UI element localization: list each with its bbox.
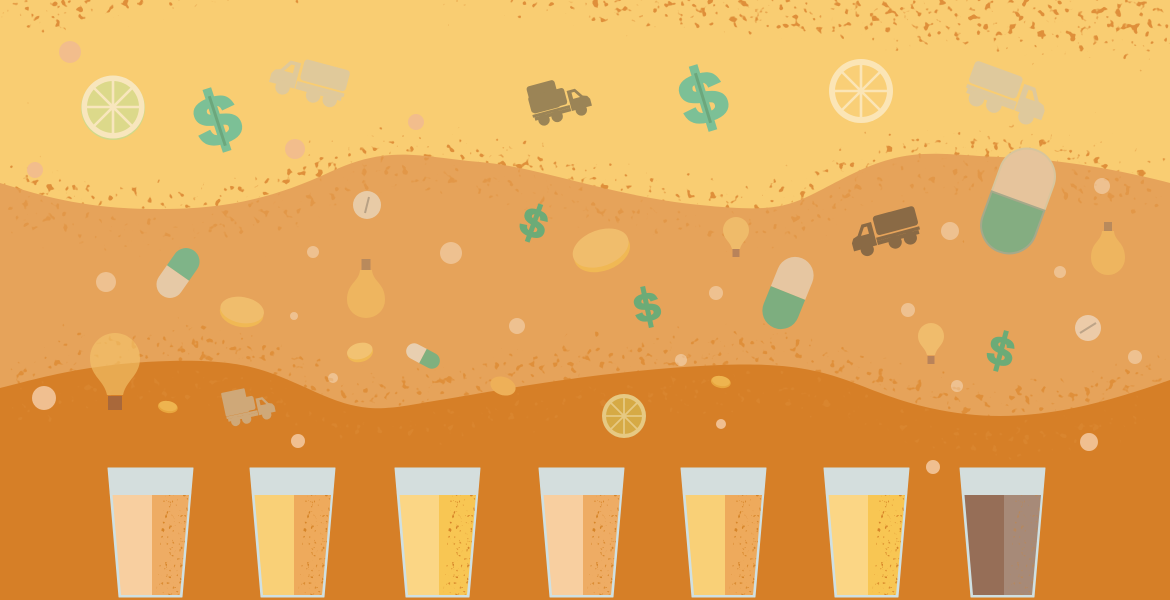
icon: coin faded: [488, 373, 518, 399]
icon: coin large: [567, 221, 636, 280]
icon: dark truck top centre: [525, 72, 594, 128]
glass 5: [681, 468, 766, 597]
icon: bulb inverted right: [1091, 222, 1125, 275]
icon: tiny capsule: [403, 340, 443, 372]
icon: coin left: [218, 293, 266, 331]
icon: dollar 2: $: [670, 54, 736, 142]
speckles: above lower wave: [0, 348, 1170, 403]
speckles: inside lower wave: [0, 385, 1170, 440]
icon: bulb upper middle: [723, 217, 749, 257]
icon: dollar 4: $: [630, 284, 664, 332]
middle orange wave layer: [0, 154, 1170, 600]
icon: dollar 1: $: [185, 78, 250, 164]
icon: dollar 5: $: [983, 327, 1019, 377]
icon: dollar 3: $: [514, 199, 553, 249]
icon: tablet right: [1075, 315, 1101, 341]
icon: faded truck bottom: [221, 383, 277, 428]
speckles: above middle wave: [0, 154, 1170, 209]
icon: large bulb left: [90, 333, 140, 410]
speckles: inside middle wave: [0, 174, 1170, 229]
icon: medium capsule: [757, 251, 819, 335]
icon: bulb inverted left: [347, 259, 385, 318]
icon: large capsule: [973, 141, 1063, 261]
glass 6: [824, 468, 909, 597]
icon: orange slice top right: [829, 59, 893, 123]
icon: lemon slice bottom: [602, 394, 646, 438]
glass 7: [960, 468, 1045, 597]
icon: tablet top: [353, 191, 381, 219]
glass 3: [395, 468, 480, 597]
icon: lime slice left: [81, 76, 145, 140]
icon: coin bottom left: [157, 399, 179, 415]
icon: coin bottom centre: [710, 374, 732, 390]
icon: pale truck top left: [267, 51, 351, 110]
glass 4: [539, 468, 624, 597]
speckles: top band: [0, 0, 1170, 62]
icon: pale truck top right: [961, 60, 1053, 129]
glass 2: [250, 468, 335, 597]
bubbles: [27, 41, 1142, 474]
glass 1: [108, 468, 193, 597]
icon: dark truck middle: [847, 205, 923, 259]
icon: coin small: [345, 340, 375, 365]
icon: bulb right: [918, 323, 944, 364]
dark orange wave layer: [0, 361, 1170, 600]
icon: small capsule left: [151, 243, 205, 303]
